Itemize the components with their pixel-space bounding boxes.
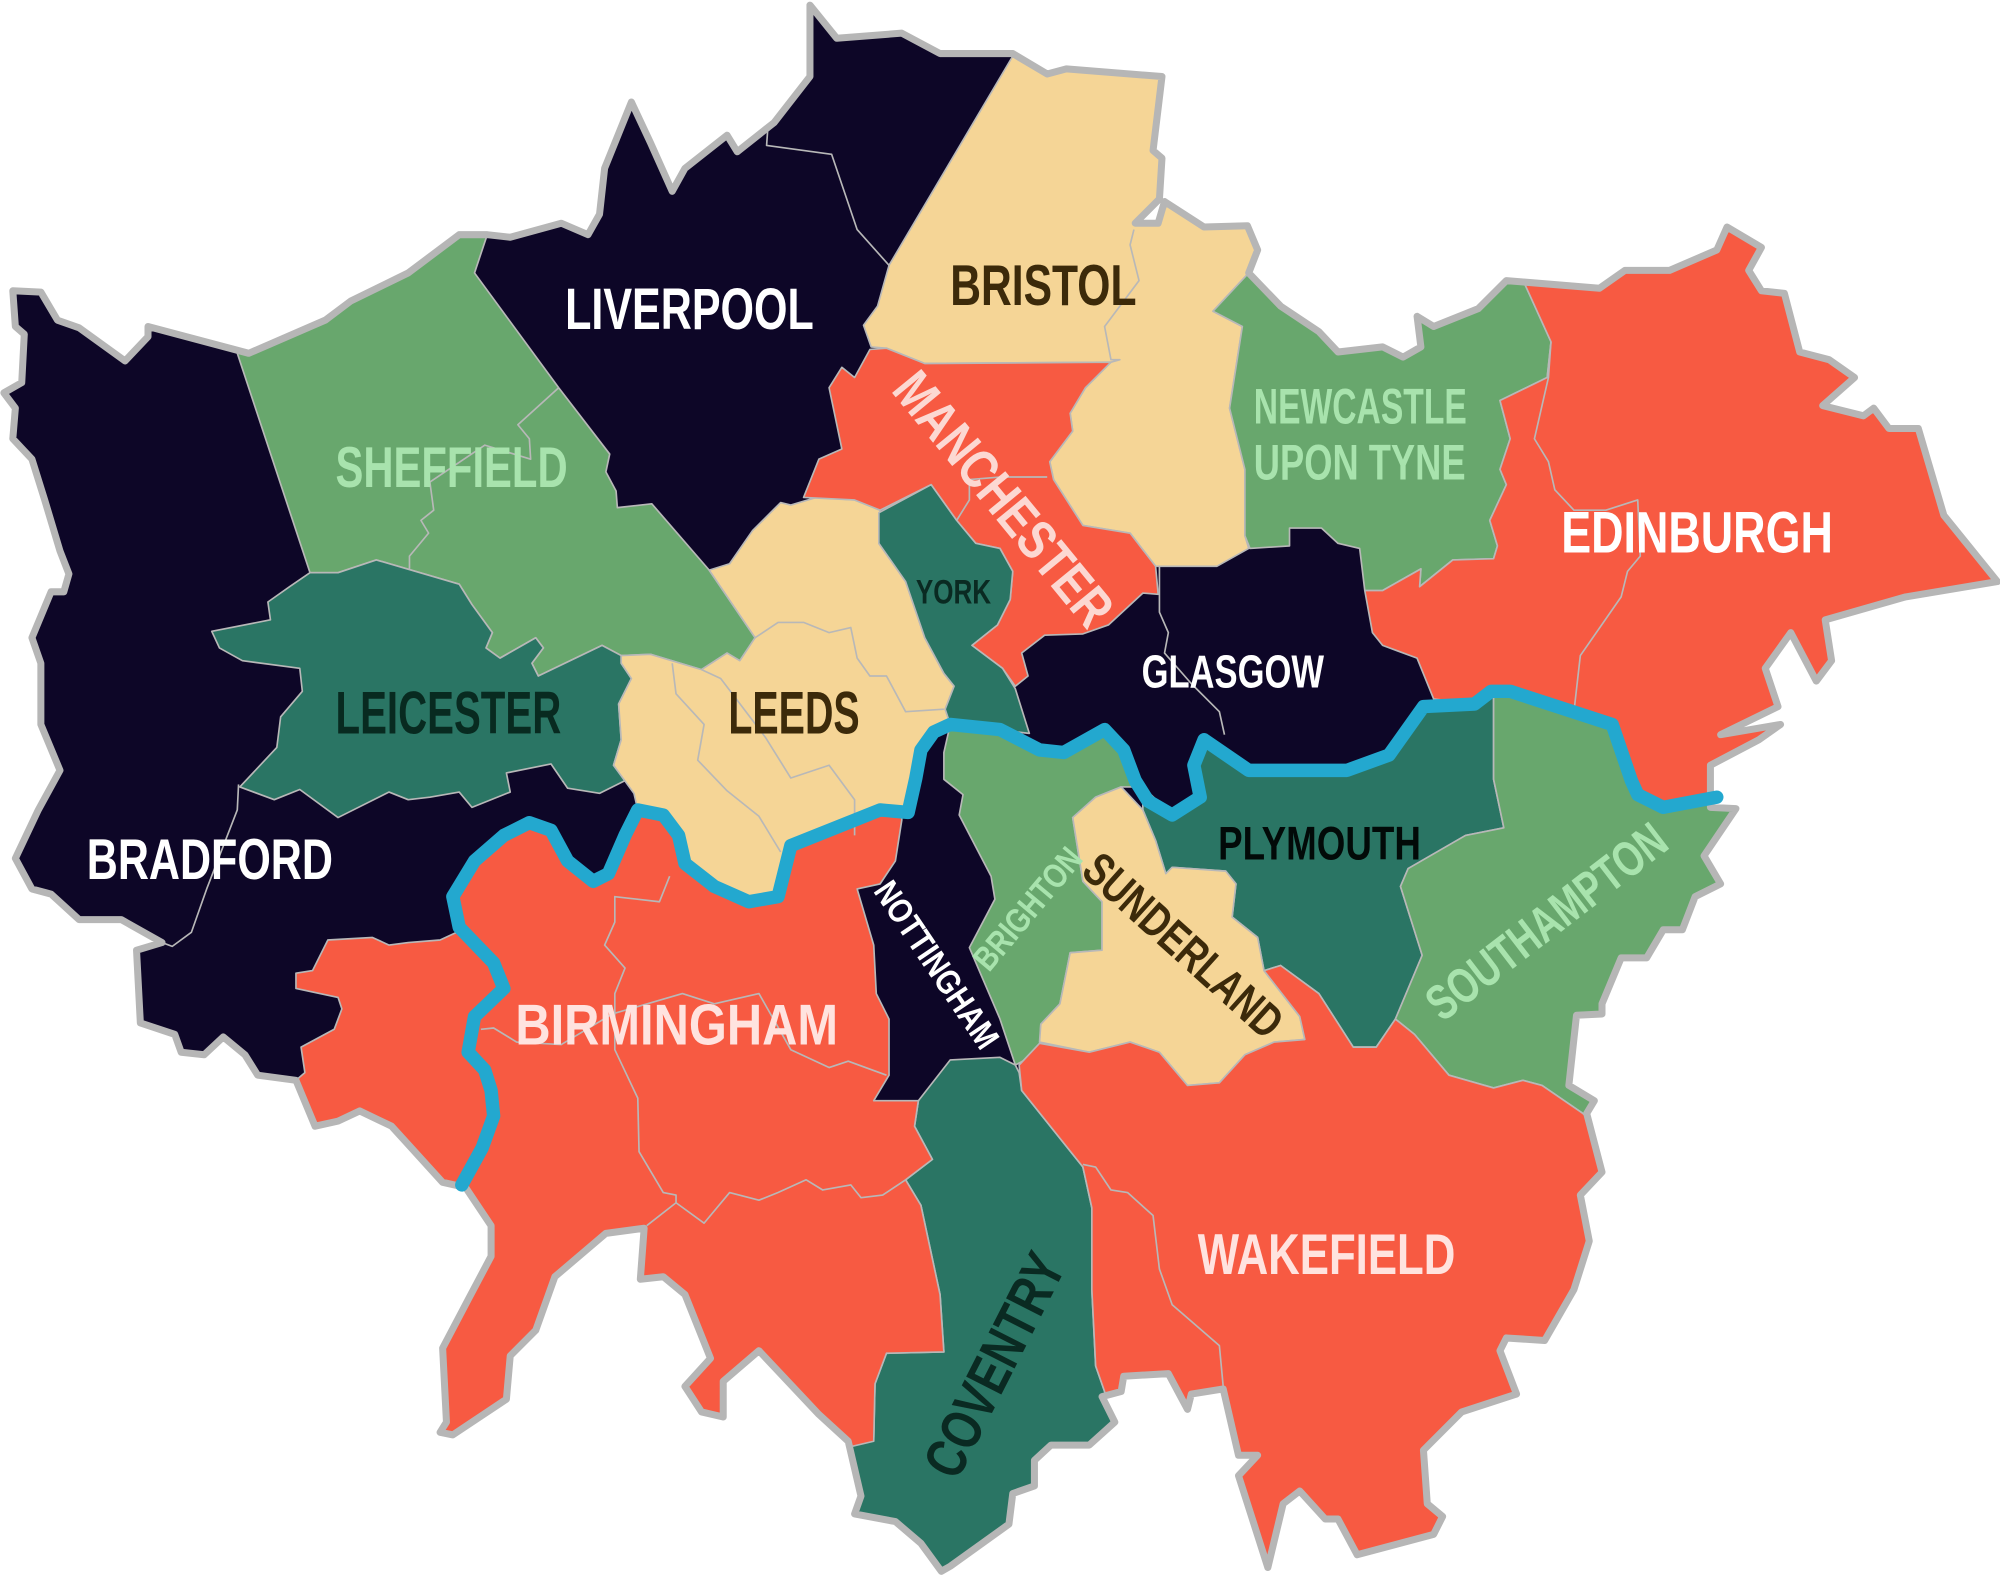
label: Manchester: MANCHESTER (881, 359, 1126, 639)
region: Southampton (1395, 691, 1760, 1113)
region: Bristol (864, 56, 1269, 566)
region: Sunderland (1040, 787, 1305, 1085)
label: Bradford: BRADFORD (87, 828, 333, 892)
label: Nottingham: NOTTINGHAM (866, 874, 1006, 1056)
region: Coventry (853, 1056, 1110, 1566)
label: Sheffield: SHEFFIELD (335, 436, 568, 500)
internal borough boundaries (162, 128, 1640, 1386)
label: Brighton: BRIGHTON (966, 840, 1090, 978)
region: Birmingham (281, 810, 944, 1467)
region: Newcastle upon Tyne (1213, 255, 1551, 591)
River Thames (453, 691, 1717, 1185)
label: Sunderland: SUNDERLAND (1072, 843, 1294, 1049)
label: Birmingham: BIRMINGHAM (515, 994, 838, 1058)
label: Newcastle upon Tyne: UPON TYNE (1254, 435, 1466, 491)
region: Plymouth (1143, 695, 1504, 1047)
label: Coventry: COVENTRY (911, 1243, 1078, 1488)
region: Sheffield (237, 217, 755, 676)
region: Leicester (212, 560, 631, 818)
region: Edinburgh (1364, 232, 1991, 800)
label: Plymouth: PLYMOUTH (1218, 818, 1421, 871)
region: Leeds (614, 497, 954, 902)
label: Leicester: LEICESTER (335, 679, 561, 746)
region: York (879, 485, 1029, 733)
label: Leeds: LEEDS (728, 679, 860, 746)
label: Southampton: SOUTHAMPTON (1415, 812, 1678, 1032)
label: Wakefield: WAKEFIELD (1198, 1223, 1455, 1287)
label: York: YORK (916, 573, 991, 611)
label: Newcastle upon Tyne: NEWCASTLE (1254, 378, 1467, 434)
label: Newcastle upon Tyne (1254, 378, 1467, 491)
label: Edinburgh: EDINBURGH (1561, 500, 1833, 565)
label: Glasgow: GLASGOW (1142, 645, 1324, 697)
label: Liverpool: LIVERPOOL (565, 277, 814, 342)
label: Bristol: BRISTOL (950, 254, 1136, 318)
region: Brighton (944, 724, 1143, 1065)
region: Manchester (804, 348, 1158, 686)
borough labels (87, 254, 1833, 1488)
region: Wakefield (1018, 964, 1598, 1555)
